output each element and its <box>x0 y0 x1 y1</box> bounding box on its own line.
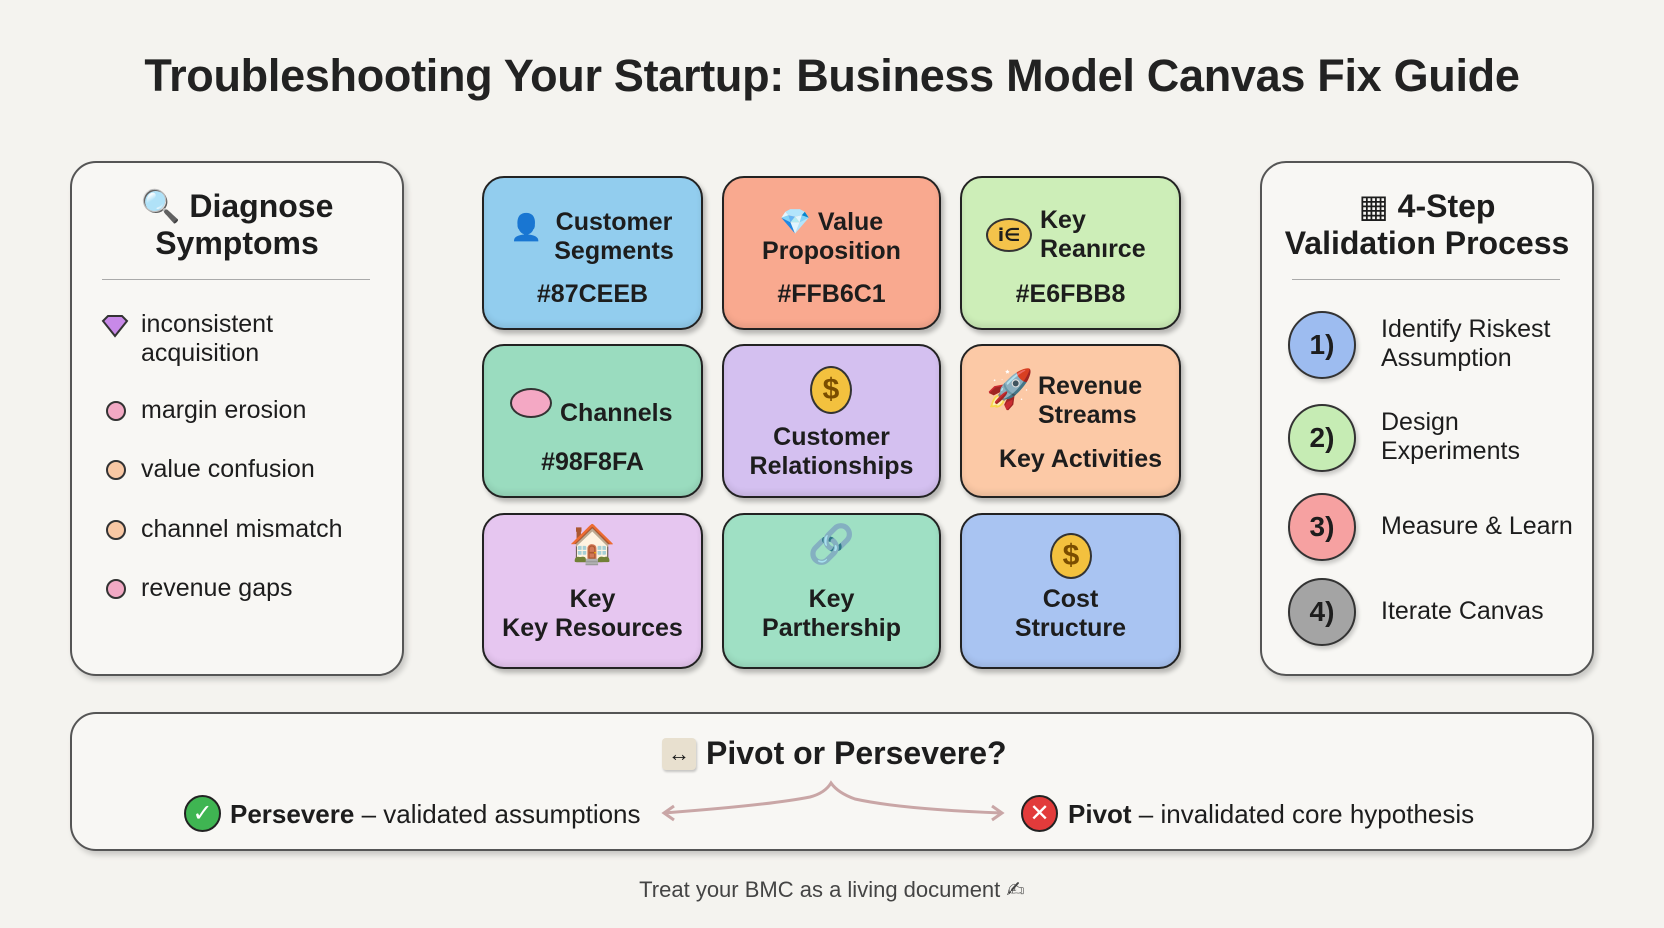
pivot option: Pivot – invalidated core hypothesis <box>1068 799 1474 829</box>
card: key resources (green): ⅰ∈ <box>998 225 1020 245</box>
card: key partnerships: Key <box>809 585 854 613</box>
card: key resources: 🏠 <box>569 524 616 566</box>
text: Experiments <box>1381 437 1520 465</box>
footer note: Treat your BMC as a living document ✍ <box>639 877 1025 902</box>
title: Troubleshooting Your Startup: Business Model Canvas Fix Guide <box>144 50 1520 101</box>
card: customer segments: 👤 <box>510 212 542 242</box>
card: revenue streams: Revenue <box>1038 372 1142 400</box>
card: key partnerships <box>722 513 941 669</box>
heading: pivot or persevere: ↔ <box>668 741 690 766</box>
card: key resources (green): Key <box>1040 206 1086 234</box>
card: value proposition: #FFB6C1 <box>777 280 886 308</box>
heading: diagnose symptoms <box>141 188 333 261</box>
panel: validation process <box>1260 161 1594 676</box>
step 4: 4) <box>1310 596 1334 627</box>
card: value proposition <box>722 176 941 330</box>
heading: pivot or persevere: Pivot or Persevere? <box>706 735 1007 771</box>
card: value proposition: Proposition <box>762 237 901 265</box>
text: margin erosion <box>141 396 306 424</box>
card: customer segments: Segments <box>554 237 674 265</box>
card: key partnerships: Parthership <box>762 614 901 642</box>
card: revenue streams <box>960 344 1181 498</box>
step 1: 1) <box>1310 329 1334 360</box>
step 4 <box>1288 578 1356 646</box>
card: cost structure <box>960 513 1181 669</box>
card: cost structure: Structure <box>1015 614 1126 642</box>
card: customer relationships <box>722 344 941 498</box>
text: value confusion <box>141 455 315 483</box>
card: key resources <box>482 513 703 669</box>
symptom: channel mismatch <box>106 520 126 540</box>
text: channel mismatch <box>141 515 342 543</box>
text: Identify Riskest <box>1381 315 1551 343</box>
heading: validation process: ▦ 4-Step <box>1359 188 1495 224</box>
arrow: decision curve <box>662 780 1004 822</box>
persevere option: Persevere – validated assumptions <box>230 799 641 829</box>
text: Assumption <box>1381 344 1512 372</box>
text: Design <box>1381 408 1459 436</box>
card: channels <box>482 344 703 498</box>
heading: validation process <box>1285 188 1569 261</box>
card: customer segments: Customer <box>556 208 672 236</box>
text: revenue gaps <box>141 574 293 602</box>
symptom: value confusion <box>106 460 126 480</box>
symptom: inconsistent acquisition <box>102 310 273 367</box>
card: revenue streams: Key Activities <box>999 445 1162 473</box>
text: Iterate Canvas <box>1381 597 1544 625</box>
symptom: revenue gaps <box>106 579 126 599</box>
card: customer relationships: Customer <box>773 423 890 451</box>
heading: diagnose symptoms: 🔍 Diagnose <box>141 188 333 224</box>
card: key partnerships: 🔗 <box>808 524 855 566</box>
card: revenue streams: Streams <box>1038 401 1137 429</box>
card: cost structure: $ <box>1063 539 1079 572</box>
step 2: 2) <box>1310 422 1334 453</box>
step 2 <box>1288 404 1356 472</box>
heading: validation process: Validation Process <box>1285 225 1569 261</box>
card: value proposition: 💎 Value <box>780 208 883 236</box>
panel: pivot or persevere <box>70 712 1594 851</box>
step 1 <box>1288 311 1356 379</box>
card: key resources: Key Resources <box>502 614 683 642</box>
card: key resources (green): Reanırce <box>1040 235 1146 263</box>
symptom: margin erosion <box>106 401 126 421</box>
card: customer segments <box>482 176 703 330</box>
card: key resources: Key <box>570 585 615 613</box>
card: customer relationships: Relationships <box>750 452 913 480</box>
symptom: inconsistent acquisition: acquisition <box>141 339 259 367</box>
card: customer segments: #87CEEB <box>537 280 648 308</box>
card: key resources (green): #E6FBB8 <box>1016 280 1125 308</box>
persevere option: ✓ <box>192 800 213 827</box>
step 3: 3) <box>1310 511 1334 542</box>
symptom: inconsistent acquisition: inconsistent <box>141 310 273 338</box>
card: customer relationships: $ <box>823 373 839 406</box>
card: key resources (green) <box>960 176 1181 330</box>
card: revenue streams: 🚀 <box>986 369 1033 411</box>
pivot option: ✕ <box>1029 800 1050 827</box>
card: channels: Channels <box>560 399 673 427</box>
step 3 <box>1288 493 1356 561</box>
text: Measure & Learn <box>1381 512 1573 540</box>
panel: diagnose symptoms <box>70 161 404 676</box>
card: cost structure: Cost <box>1043 585 1098 613</box>
heading: diagnose symptoms: Symptoms <box>155 225 319 261</box>
card: channels: #98F8FA <box>541 448 644 476</box>
